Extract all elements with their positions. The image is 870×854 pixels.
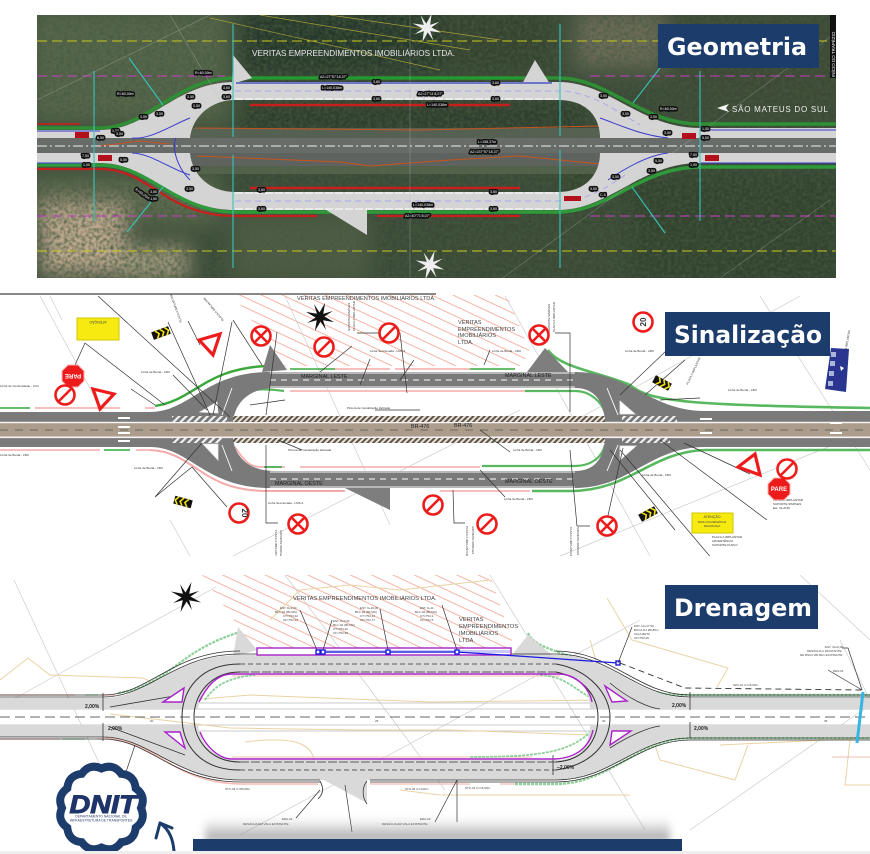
drainage annotations: SZC-01 C=15,00m: [733, 683, 759, 687]
owner names: VERITAS EMPREENDIMENTOS IMOBILIÁRIOS LTDA.: [293, 595, 437, 602]
drainage annotations: EST. 34+9,00: [825, 645, 843, 649]
dimension labels: 3,50: [116, 132, 123, 136]
dimension labels: 3,50: [156, 112, 163, 116]
existing highway: [37, 128, 837, 174]
drainage annotations: STC-04 C=80,00m: [225, 787, 251, 791]
small sign annotations: Pintura de Canalização Zebrada: [288, 448, 331, 452]
owner names: VERITAS EMPREENDIMENTOS IMOBILIÁRIOS LTDA.: [297, 295, 436, 302]
blue information panel: [825, 348, 849, 392]
dimension labels: [82, 71, 709, 218]
drainage annotations: CT=754,1: [420, 614, 434, 618]
drainage annotations: DESÁGUA A MONTANTE: [807, 649, 841, 653]
drainage annotations: CF=752,5: [420, 618, 434, 622]
green and red edge lines: [37, 78, 836, 216]
direction label: [717, 104, 828, 112]
dimension labels: 3,50: [187, 95, 194, 99]
small sign annotations: SUPORTE SIMPLES: [279, 530, 283, 558]
label: Sinalização: Sinalização: [674, 321, 822, 349]
drainage annotations: STC-04 C=4,00m: [405, 787, 429, 791]
small sign annotations: Linha de Borda - LBO: [504, 497, 534, 501]
dimension labels: 3,60: [223, 86, 230, 90]
dimension labels: 3,50: [186, 187, 193, 191]
speed limit text: 20: [240, 509, 249, 518]
dimension labels: 3,50: [150, 190, 157, 194]
dimension labels: A2=237°57'18,37": [470, 150, 500, 154]
dimension labels: A2=40°71'8,07": [405, 214, 431, 218]
hatched property area: [233, 295, 530, 366]
drainage annotations: BLC-04 (80,60x): [415, 610, 437, 614]
road names: BR-476: [411, 424, 429, 430]
warning sign: atenção right: PARA CONVERGÊNCIA: [698, 519, 727, 524]
sheet border: [0, 293, 436, 295]
central highway band: [0, 423, 870, 437]
dimension labels: 3,50: [140, 115, 147, 119]
bottom shadow: [205, 818, 670, 842]
speed limit text: [240, 317, 648, 518]
dimension labels: 5,50: [655, 159, 662, 163]
road names: [275, 373, 553, 487]
dimension labels: 7,50: [690, 153, 697, 157]
small sign annotations: SUPORTE SIMPLES: [576, 527, 580, 555]
drainage annotations: [150, 606, 844, 826]
panel: drenagem plan: [0, 575, 870, 851]
road: top marginal and lane: [0, 372, 870, 422]
small sign annotations: PLACA A IMPLANTAR: [465, 526, 469, 557]
drainage annotations: DES-01: [833, 669, 844, 673]
road names: BR-476: [454, 423, 472, 429]
north arrow: [165, 576, 207, 618]
lane markings: [0, 373, 870, 487]
drainage annotations: DESÁGUA EM VALA EXISTENTE: [382, 822, 427, 826]
small sign annotations: Linha de Borda - LBO: [141, 370, 171, 374]
drainage annotations: 25: [375, 719, 379, 723]
warning sign: atenção left: [77, 318, 119, 340]
outlet ditch: [620, 663, 863, 743]
speed limit text: 20: [639, 317, 648, 326]
small sign annotations: Linha Seccionada - LMS-2: [268, 501, 304, 505]
dimension labels: R=60,00m: [117, 92, 134, 96]
bottom strip: [0, 851, 870, 854]
dimension labels: 1,00: [702, 127, 709, 131]
slope labels: 2,00%: [694, 726, 709, 732]
owner names: VERITAS: [458, 320, 482, 326]
small sign annotations: Pintura de Canalização Zebrada: [347, 406, 390, 410]
owner names: LTDA.: [458, 340, 474, 346]
slope labels: [85, 703, 709, 771]
dimension labels: 6,50: [97, 136, 104, 140]
slope labels: 2,00%: [672, 703, 687, 709]
owner names: [293, 595, 518, 644]
panel: sinalizacao plan: [0, 293, 870, 561]
dimension labels: 3,50: [622, 112, 629, 116]
dimension labels: 3,50: [590, 187, 597, 191]
sign leader lines: [75, 296, 767, 560]
small sign annotations: Est. 31+8,50: [773, 506, 790, 510]
dimension labels: A2=27°57'18,37": [320, 75, 348, 79]
dimension labels: L=140,038m: [322, 86, 342, 90]
drainage basin strip: [257, 648, 511, 655]
panel: geometria aerial plan: [30, 9, 860, 285]
stop signs: [62, 365, 790, 500]
owner name: VERITAS EMPREENDIMENTOS IMOBILIÁRIOS LTDA.: [252, 48, 455, 58]
dimension labels: 3,60: [492, 81, 499, 85]
navy bar: [193, 839, 682, 851]
road names: MARGINAL OESTE: [505, 479, 553, 485]
magenta basin outlines: [163, 674, 631, 759]
drainage annotations: EST. 14+17,50: [634, 624, 654, 628]
small sign annotations: SUPORTE SIMPLES: [347, 303, 351, 331]
drainage annotations: CF=752,92: [283, 618, 298, 622]
owner names: LTDA.: [459, 638, 475, 644]
small sign annotations: PLACA A IMPLANTAR: [552, 301, 556, 332]
drainage annotations: EDA-02: [420, 817, 431, 821]
small sign annotations: [0, 293, 851, 561]
owner names: [297, 295, 515, 346]
triangular islands: [200, 401, 636, 460]
logo: DNIT seal: INFRAESTRUTURA DE TRANSPORTES: [70, 818, 133, 822]
drainage annotations: BLC-01 (80,60x): [275, 610, 297, 614]
logo: DNIT seal: [60, 767, 143, 849]
warning sign: atenção right: [692, 513, 733, 533]
chevron signs: [151, 326, 672, 522]
access bulbs: [232, 55, 550, 235]
owner names: IMOBILIÁRIOS: [458, 332, 496, 339]
vertical caption: INÍCIO DO TRAPÉZIO: [830, 31, 836, 77]
small sign annotations: Linha de Borda - LBO: [625, 349, 655, 353]
small sign annotations: PLACA A IMPLANTAR: [274, 530, 278, 561]
warning sign: atenção right: SEGURANÇA: [704, 524, 720, 528]
warning sign: atenção left: ATENÇÃO: [89, 320, 107, 325]
prohibition sign bars: [58, 326, 794, 533]
road: bottom marginal and lane: [0, 725, 870, 780]
road edge and center lines: [0, 651, 870, 804]
dimension labels: 3,50: [600, 94, 607, 98]
drainage annotations: BOCA D1 Ø0,80m: [634, 628, 659, 632]
dimension labels: L=140,038m: [413, 203, 433, 207]
owner names: VERITAS: [459, 617, 484, 623]
road names: MARGINAL LESTE: [301, 374, 348, 380]
stop signs: PARE: [771, 487, 787, 493]
small sign annotations: Linha de Continuidade - LCO: [0, 384, 40, 388]
access bulbs: [233, 627, 552, 803]
drainage annotations: DESÁGUA EM VALA EXISTENTE: [243, 822, 288, 826]
markings on roads: [37, 78, 836, 209]
slope labels: −2,00%: [557, 765, 575, 771]
dimension labels: 3,50: [192, 167, 199, 171]
small sign annotations: PLACA A IMPLANTAR: [842, 329, 851, 360]
road: bottom marginal and lane: [0, 438, 870, 488]
dimension labels: 3,60: [373, 80, 380, 84]
drainage annotations: CF=752,93: [333, 631, 348, 635]
highway edge lines: [0, 422, 870, 437]
drainage annotations: EST. 8+9,00: [280, 606, 297, 610]
dimension labels: 3,60: [223, 95, 230, 99]
dimension labels: 1,00: [690, 163, 697, 167]
drainage annotation leaders: [125, 605, 862, 832]
vertical caption: [830, 15, 836, 78]
small sign annotations: Linha de Borda - LBO: [134, 466, 164, 470]
drainage annotations: 20: [150, 719, 154, 723]
small sign annotations: Linha de Borda - LBO: [492, 349, 522, 353]
drainage annotations: CF=750,36: [634, 636, 649, 640]
dimension labels: 3,50: [650, 115, 657, 119]
small sign annotations: SUPORTE SIMPLES: [471, 526, 475, 554]
dimension labels: 5,50: [702, 136, 709, 140]
north arrows: [412, 15, 444, 278]
dimension labels: L=140,038m: [427, 103, 447, 107]
owner names: EMPREENDIMENTOS: [458, 327, 515, 333]
aerial photo background: [30, 10, 840, 285]
dimension labels: 3,50: [150, 197, 157, 201]
direction label: SÃO MATEUS DO SUL: [732, 105, 829, 114]
survey alignment lines: [37, 15, 860, 280]
owner names: EMPREENDIMENTOS: [459, 624, 518, 630]
green and pink edge lines: [0, 632, 870, 784]
dimension labels: 3,60: [258, 188, 265, 192]
small sign annotations: Linha de Borda - LBO: [513, 448, 543, 452]
dimension labels: R=60,00m: [660, 107, 677, 111]
dimension labels: 5,50: [120, 158, 127, 162]
small sign annotations: Linha de Borda - LBO: [728, 388, 758, 392]
drainage annotations: DE BSCC Ø0,80m EXISTENTE: [800, 653, 842, 657]
drainage annotations: EST. 8+0,00: [333, 619, 350, 623]
small sign annotations: PLACA A IMPLANTAR: [569, 527, 573, 558]
dimension labels: 3,60: [490, 190, 497, 194]
small sign annotations: SUPORTE SIMPLES: [773, 502, 801, 506]
small sign annotations: PLACA A IMPLANTAR: [685, 356, 702, 385]
small sign annotations: Linha Seccionada - LMS-2: [370, 349, 406, 353]
dimension labels: 3,60: [490, 207, 497, 211]
small sign annotations: SUPORTE SIMPLES: [547, 304, 551, 332]
small sign annotations: PLACA A IMPLANTAR: [202, 296, 225, 322]
dimension labels: 3,50: [193, 104, 200, 108]
slope labels: 2,00%: [108, 726, 123, 732]
small sign annotations: PLACA A IMPLANTAR: [352, 300, 356, 331]
road names: MARGINAL OESTE: [275, 481, 323, 487]
stop signs: PARE: [65, 372, 81, 378]
dimension labels: 7,50: [82, 154, 89, 158]
access bulbs: [262, 345, 568, 510]
yield triangles: [93, 334, 760, 475]
road: bottom marginal and lane: [37, 153, 836, 210]
road: top marginal and lane: [37, 82, 836, 138]
small sign annotations: Linha de Borda - LBO: [642, 473, 672, 477]
small sign annotations: PLACA A IMPLANTAR: [773, 498, 804, 502]
drainage annotations: EDA-01: [282, 817, 293, 821]
small sign annotations: ADVERTÊNCIA: [712, 538, 733, 543]
drainage annotations: VALA RETA: [634, 632, 650, 636]
warning sign: atenção right: ATENÇÃO: [703, 514, 721, 519]
arrow pointing to logo: [156, 823, 174, 851]
prohibition signs: [56, 312, 796, 536]
dimension labels: A2=27°11'8,07": [418, 92, 443, 96]
red and green edge lines: [0, 350, 870, 491]
contour lines: [0, 580, 870, 795]
drainage annotations: 30: [602, 719, 606, 723]
road: top marginal and lane: [0, 655, 870, 709]
dimension labels: 1,00: [83, 163, 90, 167]
owner names: IMOBILIÁRIOS: [459, 630, 498, 637]
label: Sinalização: [665, 312, 830, 356]
dimension labels: 3,60: [492, 97, 499, 101]
slope labels: 2,00%: [85, 704, 100, 710]
drainage annotations: EST. 9+11: [420, 606, 434, 610]
dimension labels: L=158,37m: [478, 140, 496, 144]
drainage annotations: CF=752,71: [360, 618, 375, 622]
drainage annotations: CT=754,32: [283, 614, 298, 618]
small sign annotations: SUPORTE DUPLO: [712, 543, 738, 547]
dimension labels: 3,50: [612, 175, 619, 179]
dimension labels: 3,50: [648, 169, 655, 173]
dimension labels: 3,60: [258, 207, 265, 211]
grid and reference lines: [40, 296, 870, 560]
dimension labels: R=60,00m: [195, 71, 212, 75]
small sign annotations: Linha de Borda - LBO: [0, 453, 30, 457]
label: Drenagem: [665, 585, 818, 629]
dimension labels: C-5: [600, 193, 606, 197]
drainage pipe: [316, 650, 620, 665]
drainage annotations: 35: [824, 719, 828, 723]
drainage annotations: CT=754,22: [333, 627, 348, 631]
road names: MARGINAL LESTE: [505, 373, 552, 379]
small sign annotations: PLACA A IMPLANTAR: [712, 535, 743, 539]
grid and reference lines: [0, 575, 870, 835]
drainage annotations: BLC-02 (80,60x): [333, 623, 355, 627]
hatched channelization strips: [172, 416, 677, 443]
small sign annotations: PLACA A IMPLANTAR: [169, 293, 183, 323]
drainage annotations: CT=754,14: [360, 614, 375, 618]
drainage annotations: EST. 9+10,00: [360, 606, 378, 610]
label: Geometria: [658, 24, 819, 68]
hatched property area: [202, 575, 512, 650]
dimension labels: R=60,00m: [134, 188, 150, 200]
dimension labels: 3,60: [373, 97, 380, 101]
red superelevation labels: [75, 132, 719, 201]
drainage annotations: BLC-03 (80,60x): [355, 610, 377, 614]
label: Geometria: Geometria: [667, 33, 807, 61]
dimension labels: 1,00: [112, 129, 119, 133]
logo: DNIT seal: DEPARTAMENTO NACIONAL DE: [75, 814, 127, 818]
dimension labels: 3,50: [664, 131, 671, 135]
north arrow: [306, 303, 334, 331]
drainage annotations: STC-04 C=15,00m: [465, 786, 491, 790]
logo: DNIT seal: DNIT: [70, 791, 140, 819]
label: Drenagem: Drenagem: [674, 594, 812, 622]
